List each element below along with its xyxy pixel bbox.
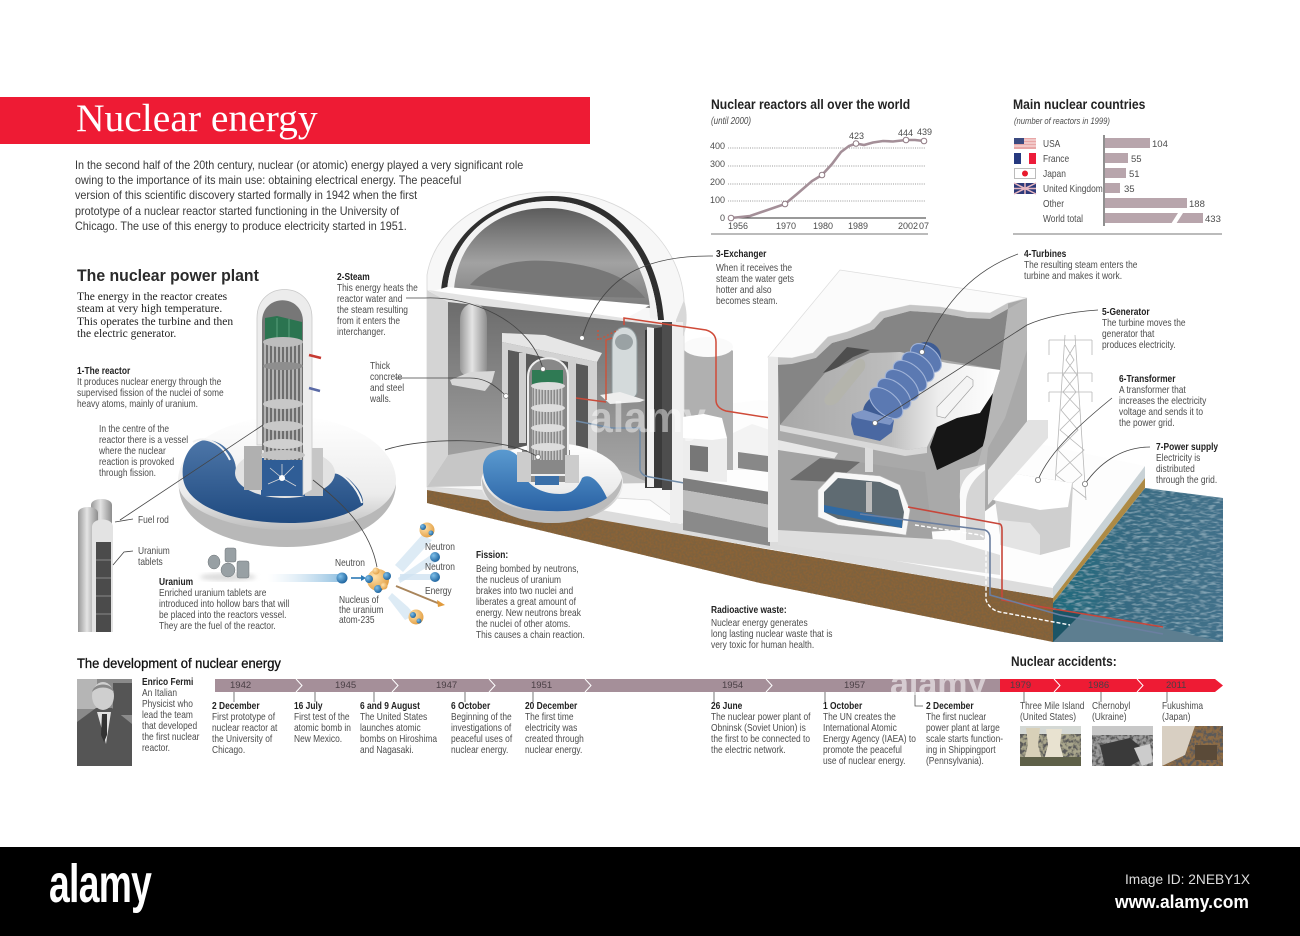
title banner: [0, 97, 590, 144]
label: fission: liberates a great amount of: [476, 596, 576, 608]
event: 1 October: International Atomic: [823, 722, 897, 734]
event: 6 and 9 August: launches atomic: [360, 722, 421, 734]
label: 1-The reactor: [77, 365, 224, 410]
event: 1 October: The UN creates the: [823, 711, 896, 723]
label: vessel: reactor there is a vessel: [99, 434, 188, 446]
label: 3-Exchanger: 3-Exchanger: [716, 248, 766, 260]
intro paragraph: Chicago. The use of this energy to produce electricity started in 1951.: [75, 219, 407, 233]
event: 26 June: [711, 700, 810, 756]
label: thick walls: walls.: [370, 393, 391, 405]
event: 20 December: electricity was: [525, 722, 577, 734]
plant summary: the electric generator.: [77, 328, 176, 340]
timeline years: 1986: [1088, 680, 1109, 691]
label: 3-Exchanger: becomes steam.: [716, 295, 778, 307]
label: 6-Transformer: the power grid.: [1119, 417, 1175, 429]
label: fission: the nuclei of other atoms.: [476, 618, 570, 630]
timeline years: 1979: [1010, 680, 1031, 691]
label: vessel: reaction is provoked: [99, 456, 174, 468]
uranium nucleus: [365, 568, 391, 593]
coolant pipes: [576, 318, 860, 514]
label: uranium: be placed into the reactors vessel.: [159, 609, 286, 621]
event: 6 and 9 August: 6 and 9 August: [360, 700, 420, 712]
label: nucleus: [339, 594, 383, 626]
label: radioactive waste: Nuclear energy generates: [711, 617, 808, 629]
event: 2 December 1942: 2 December: [212, 700, 260, 712]
watermark: timeline: alamy: [890, 665, 986, 703]
chart x axis labels: 07: [919, 221, 929, 231]
Enrico Fermi text: lead the team: [142, 709, 193, 721]
event: 16 July: atomic bomb in: [294, 722, 351, 734]
event: 2 December 1957: [926, 700, 1003, 767]
fission fragments: [408, 522, 434, 624]
label: thick walls: [370, 360, 404, 405]
concrete base slab: [427, 400, 1145, 603]
event: 6 October: peaceful uses of: [451, 733, 512, 745]
label: 5-Generator: The turbine moves the: [1102, 317, 1186, 329]
event: 2 December 1957: scale starts function-: [926, 733, 1003, 745]
Enrico Fermi text: An Italian: [142, 687, 177, 699]
event: 20 December: 20 December: [525, 700, 577, 712]
event: 6 October: investigations of: [451, 722, 511, 734]
watermark: center: alamy: [590, 394, 706, 442]
chart x axis labels: [728, 221, 929, 231]
chart subtitle: (until 2000): [711, 116, 751, 127]
countries subtitle: (number of reactors in 1999): [1014, 116, 1110, 127]
label: 7-Power supply: 7-Power supply: [1156, 441, 1218, 453]
flag: France: [1014, 153, 1036, 164]
label: 7-Power supply: distributed: [1156, 463, 1195, 475]
label: fission: brakes into two nuclei and: [476, 585, 573, 597]
label: uranium: Uranium: [159, 576, 193, 588]
country labels: Other: [1043, 198, 1064, 210]
label: 2-Steam: reactor water and: [337, 293, 402, 305]
steam exchanger: [600, 327, 645, 404]
footer url: www.alamy.com: [1115, 892, 1249, 912]
label: vessel: through fission.: [99, 467, 156, 479]
label: uranium: Enriched uranium tablets are: [159, 587, 266, 599]
label: 4-Turbines: The resulting steam enters the: [1024, 259, 1137, 271]
event: 2 December 1957: (Pennsylvania).: [926, 755, 984, 767]
chart x axis labels: 1980: [813, 221, 833, 231]
intro paragraph: prototype of a nuclear reactor started functioning in the University of: [75, 204, 399, 218]
Enrico Fermi text: reactor.: [142, 742, 170, 754]
label: 5-Generator: 5-Generator: [1102, 306, 1150, 318]
bar chart: main nuclear countries: [1013, 135, 1222, 234]
country labels: France: [1043, 153, 1069, 165]
label: 1-The reactor: supervised fission of the nuclei of some: [77, 387, 224, 399]
small reactor inside containment: [481, 358, 623, 523]
Enrico Fermi text: [142, 676, 200, 754]
event: 2 December 1957: The first nuclear: [926, 711, 986, 723]
label: 2-Steam: This energy heats the: [337, 282, 418, 294]
accident: Fukushima: [1162, 700, 1204, 723]
event: 26 June: 26 June: [711, 700, 742, 712]
auxiliary machine bar: [937, 376, 973, 418]
label: 7-Power supply: through the grid.: [1156, 474, 1217, 486]
event: 26 June: the electric network.: [711, 744, 786, 756]
label: 1-The reactor: 1-The reactor: [77, 365, 130, 377]
photo: Chernobyl: [1092, 726, 1153, 766]
country values: 104: [1152, 139, 1168, 150]
country labels: World total: [1043, 213, 1083, 225]
accident: Fukushima: Fukushima: [1162, 700, 1203, 712]
line chart: reactors worldwide: [711, 137, 928, 234]
country values: 51: [1129, 169, 1140, 180]
label: vessel: [99, 423, 188, 479]
label: 1-The reactor: It produces nuclear energy through the: [77, 376, 221, 388]
label: uranium tablets: Uranium: [138, 545, 170, 557]
label: 2-Steam: the steam resulting: [337, 304, 408, 316]
event: 2 December 1957: 2 December: [926, 700, 974, 712]
event: 1 October: Energy Agency (IAEA) to: [823, 733, 916, 745]
chart y axis labels: 0: [720, 213, 725, 223]
label: uranium: introduced into hollow bars that will: [159, 598, 289, 610]
event: 16 July: First test of the: [294, 711, 350, 723]
chart y axis labels: 100: [710, 195, 725, 205]
label: 3-Exchanger: When it receives the: [716, 262, 792, 274]
label: 7-Power supply: [1156, 441, 1218, 486]
reactor vessel and core: [244, 290, 323, 496]
containment building: [427, 192, 687, 525]
label: 4-Turbines: 4-Turbines: [1024, 248, 1066, 260]
storage tank behind containment: [683, 337, 733, 470]
label: 2-Steam: [337, 271, 418, 338]
label: 5-Generator: [1102, 306, 1186, 351]
event: 1 October: 1 October: [823, 700, 862, 712]
label: energy: Energy: [425, 585, 452, 597]
chart y axis labels: 300: [710, 159, 725, 169]
event: 2 December 1942: the University of: [212, 733, 272, 745]
sea: [1053, 488, 1223, 642]
event: 6 October: 6 October: [451, 700, 490, 712]
label: 6-Transformer: 6-Transformer: [1119, 373, 1175, 385]
containment torus: [178, 416, 396, 547]
event: 20 December: created through: [525, 733, 584, 745]
intro paragraph: In the second half of the 20th century, nuclear (or atomic) energy played a very significant role: [75, 158, 523, 172]
event: 6 October: [451, 700, 512, 756]
label: 6-Transformer: A transformer that: [1119, 384, 1186, 396]
accident: Three Mile Island: (United States): [1020, 711, 1076, 723]
country values: 35: [1124, 184, 1135, 195]
event: 2 December 1942: [212, 700, 278, 756]
label: 6-Transformer: increases the electricity: [1119, 395, 1206, 407]
event: 26 June: Obninsk (Soviet Union) is: [711, 722, 806, 734]
turbine and generator: [851, 338, 947, 441]
title: Nuclear energy: [76, 96, 318, 140]
label: fission: [476, 549, 585, 641]
timeline years: 1954: [722, 680, 743, 691]
inner concrete shield: [502, 333, 602, 470]
label: 5-Generator: generator that: [1102, 328, 1154, 340]
footer logo: alamy: [49, 854, 151, 914]
intro paragraph: version of this scientific discovery started formally in 1942 when the first: [75, 188, 417, 202]
chart value labels: 423: [849, 131, 864, 141]
callout leader lines: [113, 254, 1150, 567]
soil layer: [427, 487, 1053, 642]
event: 6 and 9 August: and Nagasaki.: [360, 744, 414, 756]
label: uranium tablets: tablets: [138, 556, 163, 568]
heading: the nuclear power plant: The nuclear power plant: [77, 266, 259, 285]
country values: [1124, 139, 1221, 225]
label: 3-Exchanger: [716, 248, 794, 307]
label: nucleus: Nucleus of: [339, 594, 379, 606]
event: 6 October: Beginning of the: [451, 711, 512, 723]
event: 20 December: nuclear energy.: [525, 744, 582, 756]
label: vessel: In the centre of the: [99, 423, 169, 435]
country labels: United Kingdom: [1043, 183, 1103, 195]
label: radioactive waste: long lasting nuclear waste that is: [711, 628, 832, 640]
timeline years: 1947: [436, 680, 457, 691]
label: 2-Steam: interchanger.: [337, 326, 386, 338]
event: 2 December 1942: First prototype of: [212, 711, 275, 723]
photo: Fukushima: [1162, 726, 1223, 766]
label: radioactive waste: [711, 604, 832, 651]
label: fission: energy. New neutrons break: [476, 607, 581, 619]
flag: USA: [1014, 138, 1036, 149]
event: 6 and 9 August: [360, 700, 438, 756]
photo: Three Mile Island: [1020, 726, 1081, 766]
label: 3-Exchanger: hotter and also: [716, 284, 772, 296]
chart x axis labels: 1989: [848, 221, 868, 231]
label: neutron out 2: Neutron: [425, 561, 455, 573]
country values: 188: [1189, 199, 1205, 210]
label: 6-Transformer: [1119, 373, 1206, 429]
pipes to the sea: [860, 507, 1163, 634]
footer image id: Image ID: 2NEBY1X: [1125, 871, 1250, 887]
Enrico Fermi text: that developed: [142, 720, 197, 732]
label: neutron in: Neutron: [335, 557, 365, 569]
accident: Chernobyl: (Ukraine): [1092, 711, 1127, 723]
label: 4-Turbines: turbine and makes it work.: [1024, 270, 1122, 282]
condenser chamber: [818, 472, 910, 535]
footer band: [0, 847, 1300, 936]
label: 6-Transformer: voltage and sends it to: [1119, 406, 1203, 418]
fission diagram: [268, 522, 445, 624]
portrait: Enrico Fermi: [77, 679, 132, 766]
transformer building: [988, 420, 1073, 555]
intro paragraph: owing to the importance of its main use: obtaining electrical energy. The peaceful: [75, 173, 461, 187]
nuclear power plant cutaway illustration: [427, 192, 1223, 642]
label: fission: the nucleus of uranium: [476, 574, 561, 586]
label: radioactive waste: very toxic for human health.: [711, 639, 814, 651]
label: fission: This causes a chain reaction.: [476, 629, 585, 641]
label: uranium tablets: [138, 545, 170, 568]
event: 16 July: New Mexico.: [294, 733, 342, 745]
chart y axis labels: 200: [710, 177, 725, 187]
event: 26 June: The nuclear power plant of: [711, 711, 810, 723]
label: fission: Being bombed by neutrons,: [476, 563, 579, 575]
event: 6 October: nuclear energy.: [451, 744, 508, 756]
event: 16 July: [294, 700, 351, 745]
country labels: Japan: [1043, 168, 1066, 180]
heading: main nuclear countries: Main nuclear countries: [1013, 97, 1145, 112]
event: 1 October: [823, 700, 916, 767]
turbine hall: [768, 270, 1027, 575]
accident: Three Mile Island: Three Mile Island: [1020, 700, 1084, 712]
timeline years: 1945: [335, 680, 356, 691]
label: 1-The reactor: heavy atoms, mainly of uranium.: [77, 398, 198, 410]
label: thick walls: Thick: [370, 360, 390, 372]
chart x axis labels: 1970: [776, 221, 796, 231]
accident: Three Mile Island: [1020, 700, 1084, 723]
heading: development timeline: The development of nuclear energy: [77, 656, 281, 671]
accident: Fukushima: (Japan): [1162, 711, 1190, 723]
Enrico Fermi text: Physicist who: [142, 698, 193, 710]
Enrico Fermi text: the first nuclear: [142, 731, 199, 743]
event: 20 December: The first time: [525, 711, 574, 723]
event: 2 December 1957: ing in Shippingport: [926, 744, 996, 756]
intro paragraph: [75, 158, 523, 233]
chart y axis labels: [710, 141, 725, 223]
chart x axis labels: 1956: [728, 221, 748, 231]
event: 1 October: use of nuclear energy.: [823, 755, 906, 767]
timeline years: 1942: [230, 680, 251, 691]
label: 4-Turbines: [1024, 248, 1137, 282]
uranium pellets: [200, 548, 256, 581]
reactor detail illustration: [78, 290, 445, 632]
event: 2 December 1942: Chicago.: [212, 744, 245, 756]
chart x axis labels: 2002: [898, 221, 918, 231]
event: 20 December: [525, 700, 584, 756]
label: 3-Exchanger: steam the water gets: [716, 273, 794, 285]
timeline years: 1951: [531, 680, 552, 691]
country labels: [1043, 138, 1103, 225]
heading: nuclear reactors chart: Nuclear reactors all over the world: [711, 97, 910, 112]
plant summary: [77, 291, 233, 340]
label: uranium: [159, 576, 289, 632]
label: fission: Fission:: [476, 549, 508, 561]
accident: Chernobyl: [1092, 700, 1130, 723]
event: 2 December 1942: nuclear reactor at: [212, 722, 277, 734]
timeline years: 2011: [1166, 680, 1186, 691]
auxiliary blocks between buildings: [683, 414, 770, 546]
heading: nuclear accidents: Nuclear accidents:: [1011, 654, 1117, 669]
label: 2-Steam: 2-Steam: [337, 271, 370, 283]
label: thick walls: concrete: [370, 371, 402, 383]
event: 26 June: the first to be connected to: [711, 733, 810, 745]
timeline years: 1957: [844, 680, 865, 691]
plant summary: This operates the turbine and then: [77, 316, 233, 328]
label: thick walls: and steel: [370, 382, 404, 394]
country labels: USA: [1043, 138, 1060, 150]
event: 6 and 9 August: The United States: [360, 711, 427, 723]
timeline bar: [215, 679, 1223, 706]
label: neutron out 1: Neutron: [425, 541, 455, 553]
label: nucleus: atom-235: [339, 614, 374, 626]
label: nucleus: the uranium: [339, 604, 383, 616]
country values: 433: [1205, 214, 1221, 225]
event: 2 December 1957: power plant at large: [926, 722, 1000, 734]
event: 16 July: 16 July: [294, 700, 322, 712]
chart value labels: 444: [898, 128, 913, 138]
label: 5-Generator: produces electricity.: [1102, 339, 1176, 351]
label: 7-Power supply: Electricity is: [1156, 452, 1200, 464]
fuel rods: [78, 499, 113, 632]
label: radioactive waste: Radioactive waste:: [711, 604, 787, 616]
pressuriser tank: [450, 304, 495, 391]
country values: 55: [1131, 154, 1142, 165]
chart value labels: [849, 127, 932, 141]
Enrico Fermi text: Enrico Fermi: [142, 676, 193, 688]
spare cylinder: [824, 359, 865, 405]
plant summary: steam at very high temperature.: [77, 303, 222, 315]
chart y axis labels: 400: [710, 141, 725, 151]
event: 6 and 9 August: bombs on Hiroshima: [360, 733, 437, 745]
electrical pylon: [1048, 335, 1092, 500]
label: 2-Steam: from it enters the: [337, 315, 400, 327]
flag: Japan: [1014, 168, 1036, 178]
label: vessel: where the nuclear: [99, 445, 166, 457]
event: 1 October: promote the peaceful: [823, 744, 902, 756]
accident: Chernobyl: Chernobyl: [1092, 700, 1130, 712]
plant summary: The energy in the reactor creates: [77, 291, 227, 303]
label: fuel rod: Fuel rod: [138, 514, 169, 526]
timeline years: [230, 680, 1186, 691]
flag: United Kingdom: [1014, 183, 1036, 194]
label: uranium: They are the fuel of the reactor.: [159, 620, 276, 632]
chart value labels: 439: [917, 127, 932, 137]
